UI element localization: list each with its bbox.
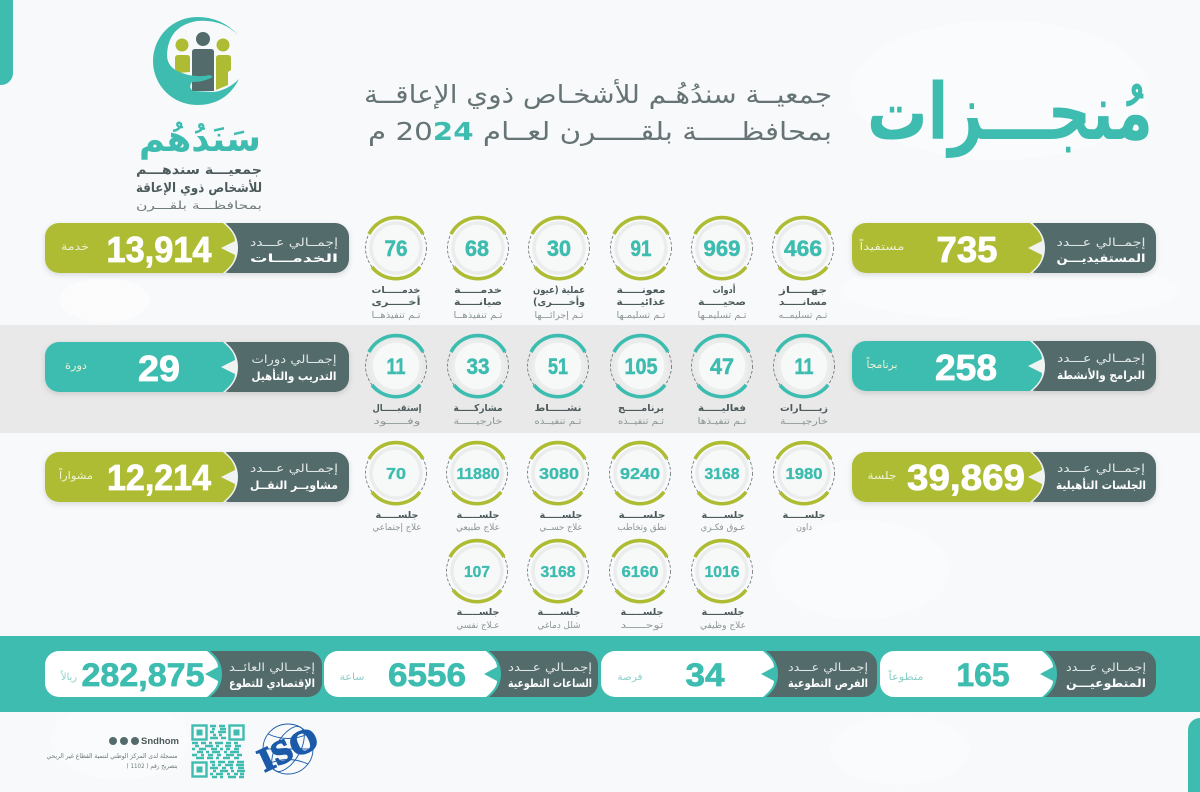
stat: 51: نشـــــاط bbox=[534, 403, 582, 414]
stat: 51: 51 bbox=[548, 354, 568, 379]
card: volunteer hours bbox=[324, 651, 598, 697]
card: beneficiaries: مستفيداً bbox=[859, 239, 904, 253]
card: rehabilitation sessions: إجمــالي عـــدد bbox=[1057, 461, 1145, 475]
card: programs: البرامج والأنشطة bbox=[1057, 368, 1145, 383]
stat: 3168 cerebral palsy: جلســـــة bbox=[538, 607, 580, 618]
card: opportunities: الفرص التطوعية bbox=[788, 676, 868, 691]
QR code bbox=[192, 726, 245, 777]
stat: 466: جهـــــاز bbox=[778, 285, 827, 296]
stat: 107 bbox=[446, 540, 508, 631]
card: opportunities: فرصة bbox=[618, 672, 643, 683]
card: rehabilitation sessions: جلسة bbox=[868, 470, 896, 482]
stat: 3168: 3168 bbox=[704, 466, 740, 483]
stat: 969: أدوات bbox=[712, 283, 736, 296]
stat: 969: صحيـــــة bbox=[698, 297, 746, 308]
stat: 68: خدمـــــة bbox=[454, 285, 502, 296]
stat: 105: تـم تنفيــذه bbox=[618, 417, 665, 427]
stat: 33: خارجيـــــة bbox=[454, 417, 502, 427]
card: volunteer hours: إجمــالي عـــدد bbox=[508, 660, 592, 674]
icon: ISO mark: ISO bbox=[253, 720, 324, 779]
stat: 30: تـم إجرائـــها bbox=[534, 311, 584, 321]
stat: 33: مشاركـــــة bbox=[454, 403, 503, 414]
stat: 68: صيانـــــة bbox=[454, 297, 502, 308]
stat: 3080 bbox=[528, 442, 588, 533]
stat: 1016: 1016 bbox=[704, 564, 740, 581]
card: rehabilitation sessions: 39,869 bbox=[907, 457, 1025, 498]
stat: 105: برنامـــــج bbox=[618, 403, 664, 414]
card: programs: إجمــالي عـــدد bbox=[1057, 351, 1145, 365]
stat: 107: عـلاج نفسي bbox=[456, 621, 500, 631]
stat: 11880: 11880 bbox=[456, 466, 500, 483]
card: programs: برنامجاً bbox=[866, 357, 898, 371]
card: volunteers: إجمــالي عـــدد bbox=[1066, 660, 1146, 674]
stat: 3168 cerebral palsy: 3168 bbox=[540, 564, 576, 581]
stat: 466: تـم تسليمــه bbox=[778, 311, 828, 321]
stat: 1016: جلســـــة bbox=[702, 607, 744, 618]
stat: 47: فعاليـــــة bbox=[698, 403, 746, 414]
stat: 3168: جلســـــة bbox=[702, 510, 744, 521]
stat: 76: 76 bbox=[384, 236, 408, 261]
stat: 1980: داون bbox=[796, 523, 812, 533]
subtitle line 1: جمعيــة سندُهُـم للأشخـاص ذوي الإعاقــة bbox=[364, 78, 832, 110]
stat: 76: أخـــــرى bbox=[372, 295, 420, 308]
card: volunteers: متطوعاً bbox=[888, 669, 924, 683]
stat: 70: جلســـــة bbox=[376, 510, 418, 521]
card: beneficiaries bbox=[852, 223, 1156, 273]
stat: 3168 cerebral palsy bbox=[528, 540, 588, 631]
card: transport trips: 12,214 bbox=[107, 457, 211, 498]
stat: 68: 68 bbox=[465, 236, 489, 261]
stat: 11 visits: 11 bbox=[794, 354, 814, 379]
stat: 11 visits: زيـــــارات bbox=[780, 403, 828, 414]
logo: name: سَنَدُهُم bbox=[139, 119, 261, 160]
card: opportunities: 34 bbox=[686, 657, 725, 693]
stat: 466: مسانـــــد bbox=[779, 297, 827, 308]
stat: 3080: جلســـــة bbox=[540, 510, 582, 521]
card: services: إجمــالي عـــدد bbox=[250, 235, 338, 249]
stat: 6160: 6160 bbox=[622, 564, 659, 581]
stat: 6160 bbox=[610, 540, 670, 631]
logo: line 1: جمعيـــة سندهـــم bbox=[136, 163, 262, 178]
stat: 1980: 1980 bbox=[786, 466, 823, 483]
card: training courses: إجمــالي دورات bbox=[252, 352, 336, 367]
corner tab: bottom right bbox=[1188, 718, 1200, 792]
stat: 11 delegations bbox=[366, 336, 426, 427]
card: transport trips: مشواراً bbox=[59, 468, 93, 482]
card: volunteers: 165 bbox=[956, 657, 1010, 693]
footer: social handle: Sndhom bbox=[141, 736, 179, 747]
card: economic return: الإقتصادي للتطوع bbox=[229, 676, 315, 691]
stat: 11880: جلســـــة bbox=[456, 510, 500, 521]
card: economic return: ريالاً bbox=[60, 670, 77, 683]
stat: 91: 91 bbox=[630, 236, 652, 261]
stat: 969 bbox=[692, 218, 752, 321]
stat: 1980: جلســـــة bbox=[782, 510, 826, 521]
logo bbox=[136, 17, 262, 212]
stat: 1016: علاج وظيفي bbox=[700, 621, 746, 631]
stat: 3168 cerebral palsy: شلل دماغي bbox=[538, 621, 580, 631]
stat: 76: تـم تنفيذهــا bbox=[372, 311, 421, 321]
stat: 70 bbox=[366, 442, 426, 533]
stat: 107: 107 bbox=[464, 564, 490, 581]
stat: 51 bbox=[528, 336, 588, 427]
logo: crescent hand bbox=[153, 17, 239, 105]
stat: 11 delegations: إستقبـــــال bbox=[372, 403, 422, 414]
stat: 47: 47 bbox=[710, 354, 734, 379]
card: services: 13,914 bbox=[106, 229, 212, 270]
stat: 105: 105 bbox=[624, 354, 658, 379]
stat: 466: 466 bbox=[784, 236, 822, 261]
gray band bbox=[0, 325, 1200, 433]
stat: 33: 33 bbox=[466, 354, 490, 379]
footer: registration text: مسجلة لدى المركز الوطني لتنمية القطاع غير الربحي bbox=[46, 752, 178, 760]
stat: 30: وأخـــــرى) bbox=[533, 295, 585, 308]
subtitle line 2: بمحافظـــــة بلقـــــرن لعــام 2024 م bbox=[368, 117, 832, 146]
card: volunteer hours: 6556 bbox=[388, 657, 466, 693]
stat: 91: غذائيـــــة bbox=[616, 297, 666, 308]
stat: 91: معونـــــة bbox=[616, 285, 666, 296]
card: opportunities bbox=[601, 651, 877, 697]
card: beneficiaries: إجمــالي عـــدد bbox=[1056, 235, 1146, 249]
card: volunteers bbox=[880, 651, 1156, 697]
stat: 11880 bbox=[446, 442, 508, 533]
card: beneficiaries: 735 bbox=[936, 229, 998, 270]
logo: line 2: للأشخاص ذوي الإعاقة bbox=[136, 179, 262, 196]
stat: 3080: 3080 bbox=[539, 466, 579, 483]
stat: 76: خدمـــــات bbox=[372, 285, 420, 296]
stat: 91 bbox=[610, 218, 672, 321]
stat: 70: علاج إجتماعي bbox=[372, 523, 422, 533]
card: economic return bbox=[45, 651, 322, 697]
stat: 3168: عـوق فكـري bbox=[700, 523, 746, 533]
teal band bbox=[0, 636, 1200, 712]
card: economic return: إجمــالي العائــد bbox=[229, 660, 315, 674]
card: training courses: دورة bbox=[65, 360, 87, 372]
stat: 30: 30 bbox=[547, 236, 571, 261]
stat: 9240 bbox=[610, 442, 670, 533]
card: training courses: التدريب والتأهيل bbox=[252, 368, 336, 384]
stat: 105 bbox=[610, 336, 672, 427]
logo: people bbox=[175, 32, 231, 91]
stat: 11 delegations: وفـــــود bbox=[374, 417, 420, 427]
card: programs bbox=[852, 341, 1156, 391]
card: transport trips: مشاويــر النقــل bbox=[250, 478, 338, 493]
card: transport trips bbox=[45, 452, 349, 502]
stat: 30: عملية (عيون bbox=[533, 285, 585, 296]
stat: 6160: جلســـــة bbox=[620, 607, 664, 618]
card: rehabilitation sessions bbox=[852, 452, 1156, 502]
stat: 466 bbox=[772, 218, 834, 321]
stat: 11 delegations: 11 bbox=[386, 354, 406, 379]
card: volunteer hours: الساعات التطوعية bbox=[508, 676, 592, 691]
stat: 11 visits bbox=[774, 336, 834, 427]
stat: 9240: 9240 bbox=[620, 466, 660, 483]
card: services bbox=[45, 223, 349, 273]
stat: 11 visits: خارجيـــــة bbox=[780, 417, 828, 427]
stat: 33 bbox=[448, 336, 508, 427]
stat: 47: تـم تنفيـذها bbox=[698, 417, 747, 427]
stat: 9240: جلســـــة bbox=[618, 510, 666, 521]
stat: 68 bbox=[448, 218, 508, 321]
stat: 969: 969 bbox=[704, 236, 740, 261]
card: training courses bbox=[45, 342, 349, 392]
stat: 11880: علاج طبيعي bbox=[456, 523, 500, 533]
card: programs: 258 bbox=[935, 347, 997, 388]
stat: 6160: توحـــــد bbox=[620, 621, 664, 631]
stat: 3080: علاج حســي bbox=[540, 523, 582, 533]
stat: 1980 bbox=[774, 442, 834, 533]
card: transport trips: إجمــالي عـــدد bbox=[250, 461, 338, 475]
footer: registration text bbox=[46, 752, 178, 770]
stat: 9240: نطق وتخاطب bbox=[618, 523, 666, 533]
footer: registration text: بتصريح رقم ( 1102 ) bbox=[126, 762, 178, 770]
card: services: الخدمـــات bbox=[250, 251, 338, 265]
stat: 68: تـم تنفيذهــا bbox=[454, 311, 503, 321]
footer: social handle bbox=[109, 736, 179, 747]
stat: 51: تـم تنفيــذه bbox=[534, 417, 582, 427]
stat: 76 bbox=[366, 218, 426, 321]
stat: 3168 bbox=[692, 442, 752, 533]
corner tab: top left bbox=[0, 0, 13, 85]
stat: 30 bbox=[528, 218, 590, 321]
card: beneficiaries: المستفيديـــن bbox=[1056, 251, 1146, 265]
card: economic return: 282,875 bbox=[82, 657, 204, 693]
card: services: خدمة bbox=[61, 241, 89, 253]
logo: line 3: بمحافظـــة بلقـــرن bbox=[136, 199, 262, 212]
stat: 91: تـم تسليمـها bbox=[616, 311, 666, 321]
stat: 47 bbox=[692, 336, 752, 427]
card: volunteer hours: ساعة bbox=[340, 672, 364, 683]
card: volunteers: المتطوعيـــن bbox=[1066, 676, 1146, 691]
card: rehabilitation sessions: الجلسات التأهيلية bbox=[1056, 477, 1146, 492]
card: opportunities: إجمــالي عـــدد bbox=[788, 660, 868, 674]
stat: 70: 70 bbox=[386, 466, 406, 483]
card: training courses: 29 bbox=[138, 348, 180, 389]
stat: 107: جلســـــة bbox=[456, 607, 500, 618]
stat: 1016 bbox=[692, 540, 752, 631]
stat: 969: تـم تسليمـها bbox=[698, 311, 747, 321]
